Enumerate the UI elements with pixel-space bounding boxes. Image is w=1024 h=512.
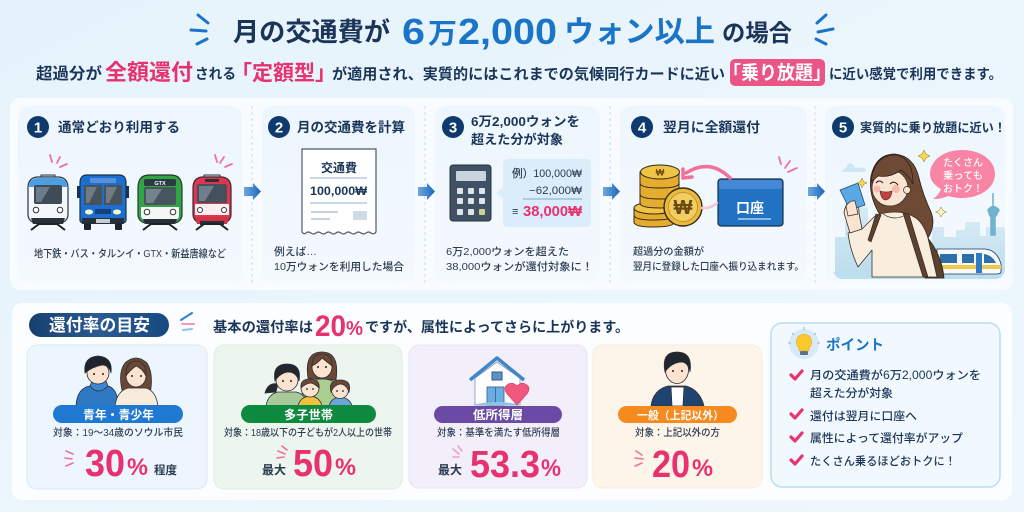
heading badge: 還付率の目安 [49, 316, 150, 335]
point 3: 属性によって還付率がアップ [810, 431, 963, 445]
panel: step 4: 翌月に登録した口座へ振り込まれます。 [633, 260, 804, 273]
icon: account card: 口座 [736, 200, 764, 216]
callout: calculation: −62,000₩ [529, 185, 583, 197]
title: の場合 [722, 20, 792, 46]
card: general [593, 345, 762, 488]
panel: step 5 [825, 106, 1006, 283]
icon: sparks left [50, 155, 67, 167]
panel: step 3: 3 [449, 120, 457, 136]
card: low income [409, 345, 587, 488]
subtitle: が適用され、実質的にはこれまでの気候同行カードに近い [332, 65, 725, 83]
panel: step 3: 38,000ウォンが還付対象に！ [446, 260, 593, 273]
subtitle [36, 59, 1002, 86]
panel: step 5: 実質的に乗り放題に近い！ [860, 120, 1006, 135]
panel: step 3: 超えた分が対象 [471, 132, 563, 147]
panel: step 2: 2 [275, 120, 283, 136]
subtitle: 「乗り放題」 [723, 62, 831, 84]
point 1: 超えた分が対象 [810, 386, 894, 400]
title: 月の交通費が [233, 17, 390, 47]
arrow: step 3 to 4 [603, 183, 620, 200]
icon: GTX train [138, 175, 182, 230]
arrow: account to coins [683, 167, 730, 208]
icon: subway train [28, 175, 68, 230]
icon: coins: ₩ [656, 168, 665, 178]
arrow: step 2 to 3 [418, 183, 435, 200]
icon: GTX train: GTX [154, 181, 166, 187]
rate: 30%: % [127, 454, 148, 481]
panel: step 4: 4 [638, 120, 647, 136]
point 4: たくさん乗るほどおトクに！ [810, 455, 956, 468]
panel: steps [10, 98, 1013, 290]
icon: sparks [779, 157, 797, 172]
panel: step 1: 地下鉄・バス・タルンイ・GTX・新益唐線など [34, 247, 226, 260]
panel: step 2: 10万ウォンを利用した場合 [274, 260, 405, 273]
label pill [434, 406, 562, 423]
rate: up to 50%: % [335, 454, 356, 481]
icon: bus [77, 175, 129, 230]
panel: return rates [12, 303, 1012, 500]
panel: step 2: 月の交通費を計算 [297, 119, 405, 135]
panel: points: ポイント [826, 337, 884, 354]
label pill [241, 405, 376, 423]
rate: up to 53.3%: 最大 [438, 462, 462, 477]
point 1: 月の交通費が6万2,000ウォンを [810, 368, 981, 382]
subtitle: される [195, 66, 236, 83]
card: low income: 対象：基準を満たす低所得層 [437, 426, 560, 439]
label pill: 低所得層 [473, 407, 523, 422]
callout: calculation: ≡ [512, 206, 518, 218]
panel: step 5: 5 [839, 120, 847, 136]
dividers [252, 106, 815, 283]
icon: receipt: 100,000₩ [310, 184, 368, 198]
arrow: step 4 to 5 [808, 183, 825, 200]
illustration: family [265, 352, 352, 406]
rate: 30% [85, 443, 177, 485]
label pill [618, 406, 737, 423]
rate: up to 53.3% [438, 444, 561, 486]
subtitle: 全額還付 [105, 60, 193, 85]
illustration: girl with card [840, 154, 944, 278]
rate: up to 50%: 最大 [262, 462, 286, 477]
rate: up to 50%: 50 [293, 443, 333, 485]
card: youth [27, 345, 207, 489]
panel: step 2 [262, 106, 415, 283]
panel: step 2: 例えば… [274, 245, 317, 258]
label pill: 一般（上記以外） [637, 408, 724, 422]
icon: heading accent [181, 313, 194, 330]
rate: up to 53.3%: 53.3 [470, 444, 540, 486]
panel: step 4: 翌月に全額還付 [663, 119, 761, 135]
callout: speech bubble: おトク！ [943, 183, 983, 195]
card: general: 対象：上記以外の方 [635, 426, 720, 439]
card: multi-child: 対象：18歳以下の子どもが2人以上の世帯 [224, 426, 392, 439]
label pill: 青年・青少年 [83, 407, 154, 422]
card: youth: 対象：19〜34歳のソウル市民 [53, 426, 183, 439]
panel: points [771, 323, 1000, 487]
panel: step 4 [620, 106, 807, 283]
rate headline [213, 310, 629, 343]
point 2: 還付は翌月に口座へ [810, 409, 918, 423]
icon: account card [718, 179, 783, 226]
callout: speech bubble: 乗っても [943, 169, 983, 182]
arrow: step 1 to 2 [244, 183, 261, 200]
icon: receipt: 交通費 [321, 160, 357, 175]
icon: burst [277, 446, 287, 458]
illustration: city skyline and train [833, 163, 1005, 279]
icon: coins: ₩ [674, 197, 693, 219]
icon: burst [453, 446, 462, 457]
icon: title burst left [191, 15, 208, 44]
card: multi-child [214, 345, 402, 489]
panel: step 3: 6万2,000ウォンを [471, 114, 580, 129]
rate headline: % [346, 318, 363, 340]
label pill: 多子世帯 [284, 407, 333, 422]
title [233, 11, 792, 52]
title: ウォン以上 [564, 16, 715, 49]
panel: step 3: 6万2,000ウォンを超えた [446, 245, 569, 258]
rate headline: 20 [315, 310, 346, 343]
rate: 20%: 20 [652, 444, 690, 486]
icon: Shinbundang train [193, 175, 231, 230]
rate: 20% [652, 444, 713, 486]
label pill [53, 405, 183, 423]
subtitle: に近い感覚で利用できます。 [829, 66, 1002, 82]
icon: receipt [302, 149, 376, 234]
icon: title burst right [816, 15, 833, 44]
rate headline: ですが、属性によってさらに上がります。 [365, 319, 629, 335]
panel: step 3 [435, 106, 600, 283]
panel: step 1: 通常どおり利用する [58, 120, 180, 135]
title: 万 [428, 18, 457, 49]
rate headline: 基本の還付率は [213, 318, 313, 336]
icon: burst [635, 451, 643, 466]
subtitle: 超過分が [36, 64, 102, 83]
point 1 [791, 368, 981, 400]
rate: 20%: % [692, 455, 713, 482]
icon: burst [65, 451, 73, 466]
rate: 30%: 30 [85, 443, 125, 485]
callout: calculation: 例）100,000₩ [512, 167, 583, 180]
callout: speech bubble [930, 150, 995, 199]
illustration: two young people [76, 356, 158, 406]
icon: sparks right [215, 155, 232, 167]
rate: up to 53.3%: % [541, 455, 561, 482]
rate: up to 50% [262, 443, 356, 485]
callout: calculation: 38,000₩ [523, 203, 583, 220]
title: 2,000 [458, 11, 557, 52]
illustration: man in jacket [651, 352, 704, 406]
panel: step 1: 1 [34, 120, 42, 136]
panel: step 4: 超過分の金額が [633, 245, 705, 258]
callout: calculation [496, 159, 591, 227]
panel: step 1 [18, 106, 242, 283]
heading badge [29, 313, 169, 337]
rate: 30%: 程度 [154, 463, 177, 477]
callout: speech bubble: たくさん [943, 157, 983, 169]
icon: light bulb [788, 327, 820, 359]
icon: calculator [450, 165, 491, 221]
subtitle: 「定額型」 [231, 62, 336, 85]
icon: sparkles [857, 150, 946, 217]
illustration: house with heart [470, 358, 529, 405]
icon: coins [634, 165, 702, 227]
title: 6 [402, 11, 425, 52]
